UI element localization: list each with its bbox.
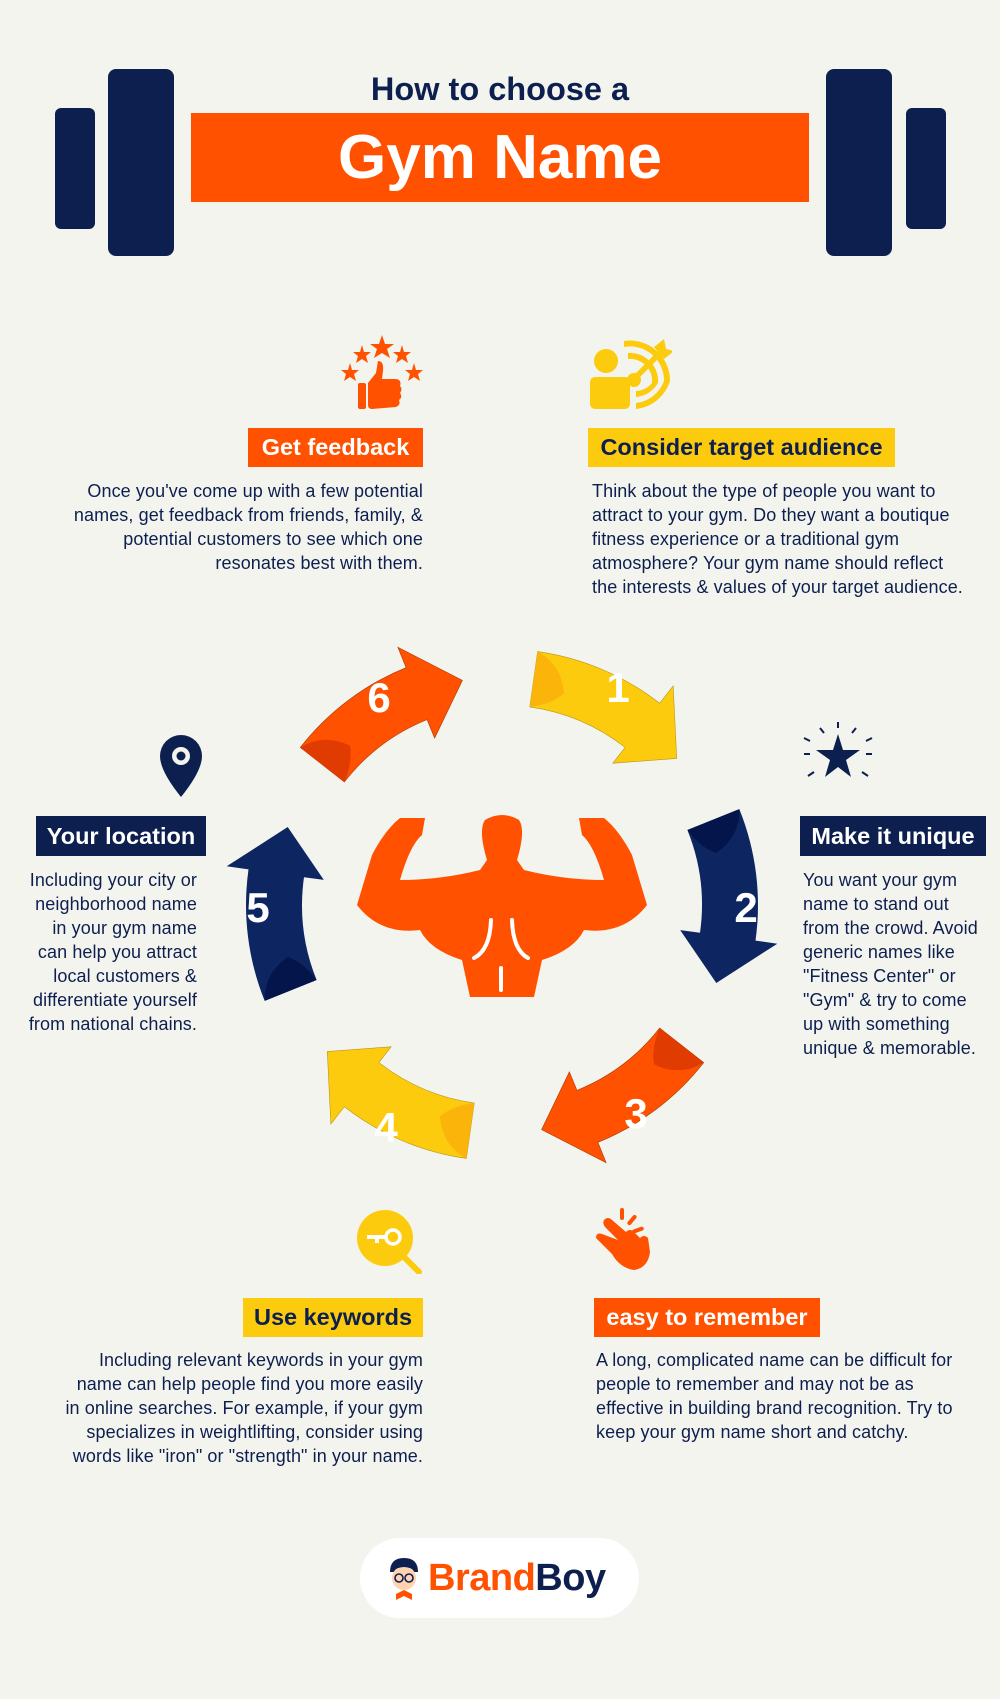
text: feedback: Once you've come up with a few potential [87,481,423,501]
text: feedback: resonates best with them. [215,553,423,573]
text: easy to remember: A long, complicated name can be difficult for [596,1350,952,1370]
arrow 5 [227,827,324,1001]
barbell left big plate [108,69,174,256]
arrow 6 [281,628,480,799]
text: easy to remember: keep your gym name short and catchy. [596,1422,908,1442]
text: unique: name to stand out [803,894,949,914]
text: target audience: Think about the type of people you want to [592,481,935,501]
text: location [29,870,197,1034]
icon: star [804,722,872,777]
icon: target audience [590,339,672,409]
icon: boy face [390,1558,418,1600]
icon: location pin [160,735,202,797]
label: your location [36,816,206,856]
label: easy to remember [594,1298,820,1337]
text: easy to remember: effective in building brand recognition. Try to [596,1398,953,1418]
logo: BrandBoy: BrandBoy [428,1557,606,1599]
text: target audience: attract to your gym. Do they want a boutique [592,505,950,525]
label: make it unique: Make it unique [811,823,975,849]
step numbers: 5 [246,884,270,931]
label: use keywords [243,1298,423,1337]
logo: BrandBoy [360,1538,639,1618]
text: unique: "Fitness Center" or [803,966,956,986]
text: unique: unique & memorable. [803,1038,976,1058]
arrow 4 [297,1020,496,1191]
text: location: differentiate yourself [33,990,197,1010]
title bar: Gym Name [191,113,809,202]
text: feedback [74,481,423,573]
text: target audience [592,481,963,597]
text: unique: You want your gym [803,870,957,890]
barbell right small plate [906,108,946,229]
step numbers: 6 [367,674,391,721]
text: location: in your gym name [52,918,197,938]
text: keywords: name can help people find you more easily [77,1374,423,1394]
text: target audience: the interests & values of your target audience. [592,577,963,597]
step numbers: 3 [624,1090,648,1137]
label: consider target audience [588,428,895,467]
label: easy to remember: easy to remember [606,1304,808,1330]
text: feedback: names, get feedback from friends, family, & [74,505,423,525]
text: location: neighborhood name [35,894,197,914]
text: location: from national chains. [29,1014,197,1034]
text: keywords: in online searches. For example, if your gym [65,1398,423,1418]
figure: bodybuilder [357,815,647,997]
arrow 3 [524,1011,723,1182]
label: get feedback [248,428,423,467]
text: unique [803,870,978,1058]
text: easy to remember [596,1350,953,1442]
text: location: local customers & [53,966,197,986]
label: consider target audience: Consider target audience [600,434,883,460]
text: keywords: specializes in weightlifting, consider using [86,1422,423,1442]
icon: thumbs up stars [341,335,423,409]
barbell left small plate [55,108,95,229]
label: use keywords: Use keywords [254,1304,412,1330]
label: make it unique [800,816,986,856]
title bar: Gym Name: Gym Name [338,123,662,192]
text: unique: from the crowd. Avoid [803,918,978,938]
step numbers [246,664,758,1151]
text: unique: generic names like [803,942,955,962]
text: target audience: atmosphere? Your gym name should reflect [592,553,943,573]
text: keywords: words like "iron" or "strength" in your name. [73,1446,423,1466]
step numbers: 1 [606,664,630,711]
icon: key search [357,1210,422,1274]
text: location: Including your city or [30,870,197,890]
title: how to choose a: How to choose a [371,71,629,107]
barbell right big plate [826,69,892,256]
text: unique: "Gym" & try to come [803,990,967,1010]
text: location: can help you attract [38,942,197,962]
step numbers: 4 [374,1104,398,1151]
text: unique: up with something [803,1014,950,1034]
text: target audience: fitness experience or a traditional gym [592,529,899,549]
label: your location: Your location [47,823,195,849]
text: keywords [65,1350,423,1466]
arrow 2 [680,809,777,983]
icon: hand snap [596,1208,650,1270]
arrow 1 [508,619,707,790]
label: get feedback: Get feedback [262,434,409,460]
text: keywords: Including relevant keywords in your gym [99,1350,423,1370]
step numbers: 2 [734,884,758,931]
text: feedback: potential customers to see which one [123,529,423,549]
text: easy to remember: people to remember and may not be as [596,1374,914,1394]
